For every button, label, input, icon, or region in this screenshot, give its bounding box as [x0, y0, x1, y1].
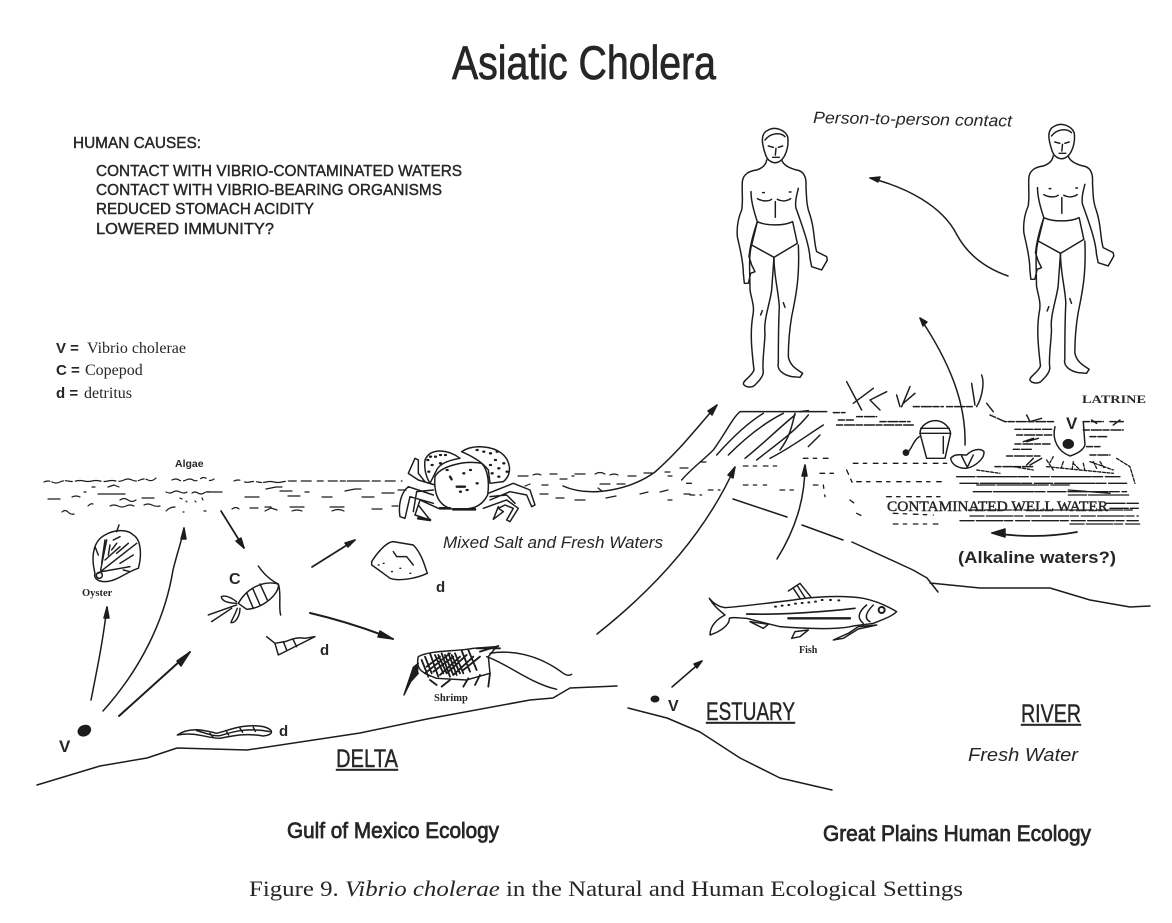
- legend: [56, 340, 186, 402]
- person-to-person label: Person-to-person contact: [813, 109, 1014, 130]
- caption: Figure 9. Vibrio cholerae in the Natural and Human Ecological Settings: [249, 876, 963, 901]
- legend: d =: [56, 385, 78, 402]
- contaminated well water label: CONTAMINATED WELL WATER: [887, 499, 1108, 515]
- text block: human causes: LOWERED IMMUNITY?: [96, 221, 274, 238]
- legend: C =: [56, 362, 80, 379]
- latrine V: V: [1066, 414, 1078, 433]
- fish label: Fish: [799, 645, 818, 656]
- icon: rock: [951, 449, 984, 468]
- mixed waters label: Mixed Salt and Fresh Waters: [443, 534, 663, 552]
- riverbank and well: [682, 375, 1140, 524]
- icon: detritus rock: [372, 542, 427, 580]
- icon: detritus fragment: [267, 637, 315, 655]
- water surface: [44, 462, 706, 514]
- label d: d: [436, 579, 445, 596]
- legend: Vibrio cholerae: [87, 340, 186, 357]
- icon: fish: [709, 583, 897, 640]
- label V estuary: V: [668, 698, 679, 715]
- icon: bucket and ladle: [903, 421, 951, 458]
- text block: human causes: HUMAN CAUSES:: [73, 135, 201, 152]
- label V: V: [59, 737, 71, 756]
- organisms of mixed waters: [372, 447, 572, 695]
- text block: human causes: [73, 135, 462, 238]
- text block: human causes: CONTACT WITH VIBRIO-BEARING ORGANISMS: [96, 182, 442, 199]
- contaminated water lines: [687, 457, 1140, 524]
- arrow: person to person: [870, 177, 1008, 276]
- alkaline waters label: (Alkaline waters?): [958, 548, 1116, 567]
- latrine label: LATRINE: [1082, 392, 1146, 406]
- hill: [682, 411, 827, 480]
- label: estuary: ESTUARY: [706, 698, 795, 726]
- icon: crab: [399, 447, 535, 522]
- arrow: well to person: [920, 318, 965, 445]
- label C: C: [229, 571, 241, 588]
- fresh water label: Fresh Water: [968, 745, 1079, 765]
- organisms of the delta: [76, 525, 315, 739]
- icon: shrimp: [404, 646, 572, 695]
- heading: gulf of mexico ecology: Gulf of Mexico Ecology: [287, 818, 499, 843]
- title: Asiatic Cholera: [452, 36, 717, 89]
- shrimp label: Shrimp: [434, 693, 468, 704]
- figure: person left: [737, 128, 827, 387]
- label: river: RIVER: [1021, 700, 1081, 728]
- legend: Copepod: [85, 362, 143, 379]
- icon: oyster: [93, 525, 140, 582]
- arrows: delta food web: [91, 511, 393, 716]
- heading: great plains human ecology: Great Plains Human Ecology: [823, 821, 1091, 846]
- arrows: to human setting: [563, 405, 1077, 687]
- text block: human causes: REDUCED STOMACH ACIDITY: [96, 201, 314, 218]
- legend: V =: [56, 340, 79, 357]
- ground and grass: [833, 375, 1123, 467]
- text block: human causes: CONTACT WITH VIBRIO-CONTAMINATED WATERS: [96, 163, 462, 180]
- label: delta: DELTA: [336, 745, 398, 773]
- figure: person right: [1024, 124, 1114, 383]
- icon: detritus worm: [177, 726, 271, 738]
- algae label: Algae: [175, 458, 204, 470]
- icon: vibrio cell: [76, 723, 93, 739]
- shorelines: [37, 499, 1150, 790]
- estuary vibrio: [650, 696, 660, 702]
- label d: d: [279, 723, 288, 740]
- icon: latrine pit: [1054, 422, 1085, 456]
- legend: detritus: [84, 385, 132, 402]
- icon: copepod: [208, 566, 281, 623]
- label d: d: [320, 642, 329, 659]
- oyster label: Oyster: [82, 588, 113, 599]
